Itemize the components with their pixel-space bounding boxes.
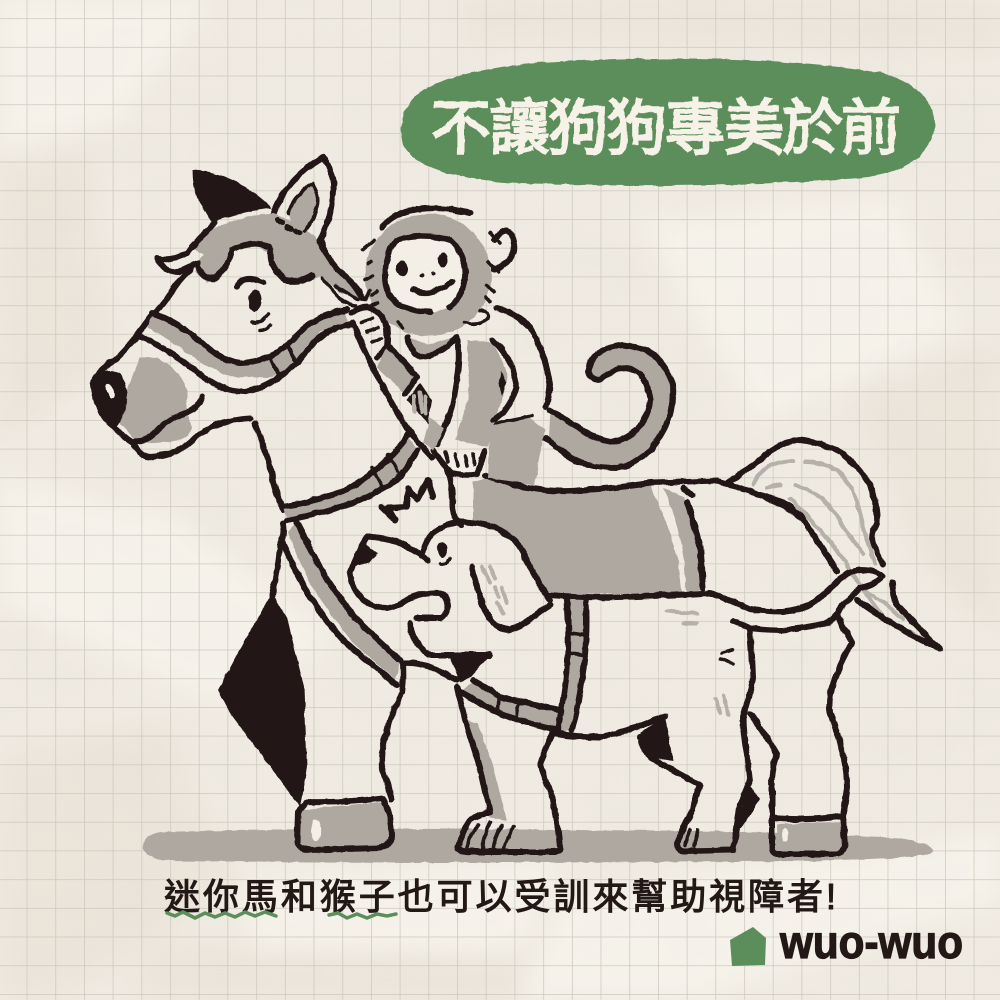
ground shadow xyxy=(143,829,933,862)
chest strap xyxy=(288,524,400,680)
caption text: 迷你馬和猴子也可以受訓來幫助視障者! xyxy=(164,876,836,917)
horse rear leg xyxy=(750,714,777,818)
dog ear xyxy=(472,567,550,630)
dog front leg xyxy=(457,687,560,852)
dog xyxy=(350,522,883,852)
monkey leg xyxy=(488,418,545,485)
horse front hoof xyxy=(298,802,392,849)
monkey fur ticks xyxy=(362,233,500,328)
monkey eyes xyxy=(396,260,408,276)
horse brow and wrinkles xyxy=(237,279,263,287)
monkey ear xyxy=(494,231,514,270)
dog collar tag xyxy=(450,655,490,683)
brand name: wuo-wuo xyxy=(779,916,963,968)
dog belly xyxy=(553,716,665,737)
horse front leg xyxy=(382,663,403,800)
monkey nose xyxy=(420,272,424,278)
dog head top xyxy=(423,522,550,600)
dog lower jaw xyxy=(410,623,490,655)
horse inner ear xyxy=(288,183,318,232)
horse rear hoof xyxy=(777,822,845,850)
horse muzzle xyxy=(120,357,192,443)
title text: 不讓狗狗專美於前 xyxy=(431,95,901,162)
dog marks xyxy=(667,611,728,714)
dog body patch xyxy=(640,716,673,761)
horse bridle xyxy=(147,311,348,378)
monkey smile xyxy=(413,282,452,293)
horse tail xyxy=(753,461,913,633)
monkey near hand xyxy=(434,449,484,474)
caption xyxy=(164,876,836,918)
horse mane xyxy=(193,213,364,302)
green wavy underline: monkey xyxy=(329,913,396,918)
dog harness strap xyxy=(462,683,558,730)
monkey xyxy=(352,208,673,485)
horse chest black patch xyxy=(218,593,307,807)
horse head outline xyxy=(93,270,250,457)
rein strap xyxy=(423,418,444,450)
horse mouth xyxy=(133,397,202,442)
horse xyxy=(93,157,940,854)
monkey head top outline xyxy=(382,208,470,227)
horse back xyxy=(485,475,837,571)
monkey head fur xyxy=(365,214,491,336)
monkey near arm xyxy=(455,340,507,447)
banner shape xyxy=(401,59,935,186)
neck strap xyxy=(283,436,417,520)
surprise mark xyxy=(382,480,433,520)
ear inner outline xyxy=(288,183,318,231)
mane outline xyxy=(157,220,312,281)
horse nose xyxy=(93,370,127,427)
mane back of neck xyxy=(320,240,362,298)
horse neck and chest xyxy=(255,423,284,595)
dog eye xyxy=(437,542,447,558)
monkey far arm xyxy=(377,347,417,394)
title banner xyxy=(401,59,935,186)
horse rear ear xyxy=(193,170,272,222)
icon: green house xyxy=(730,927,766,966)
monkey body xyxy=(497,308,550,407)
nostril xyxy=(104,383,116,399)
dog ear markings xyxy=(482,567,507,613)
horse blanket xyxy=(473,478,682,594)
dog hind leg xyxy=(640,630,753,851)
dog hind patch xyxy=(737,785,760,832)
monkey far hand xyxy=(352,307,388,358)
monkey face xyxy=(385,236,465,313)
monkey hatching shadow xyxy=(407,383,432,424)
dog snout xyxy=(350,537,448,618)
monkey tail xyxy=(545,345,673,468)
dog nose xyxy=(353,542,378,567)
dog chest xyxy=(403,663,457,680)
horse rein line xyxy=(353,323,432,458)
monkey chin xyxy=(410,337,456,357)
dog harness vertical band xyxy=(558,600,586,733)
illustration: horse, monkey and dog xyxy=(93,157,940,854)
horse eye xyxy=(248,290,262,312)
dog back xyxy=(550,570,883,630)
dog front leg shading xyxy=(468,720,507,820)
horse front ear xyxy=(273,157,334,240)
brand logo xyxy=(730,916,963,968)
green wavy underline: mini horse xyxy=(167,912,276,918)
